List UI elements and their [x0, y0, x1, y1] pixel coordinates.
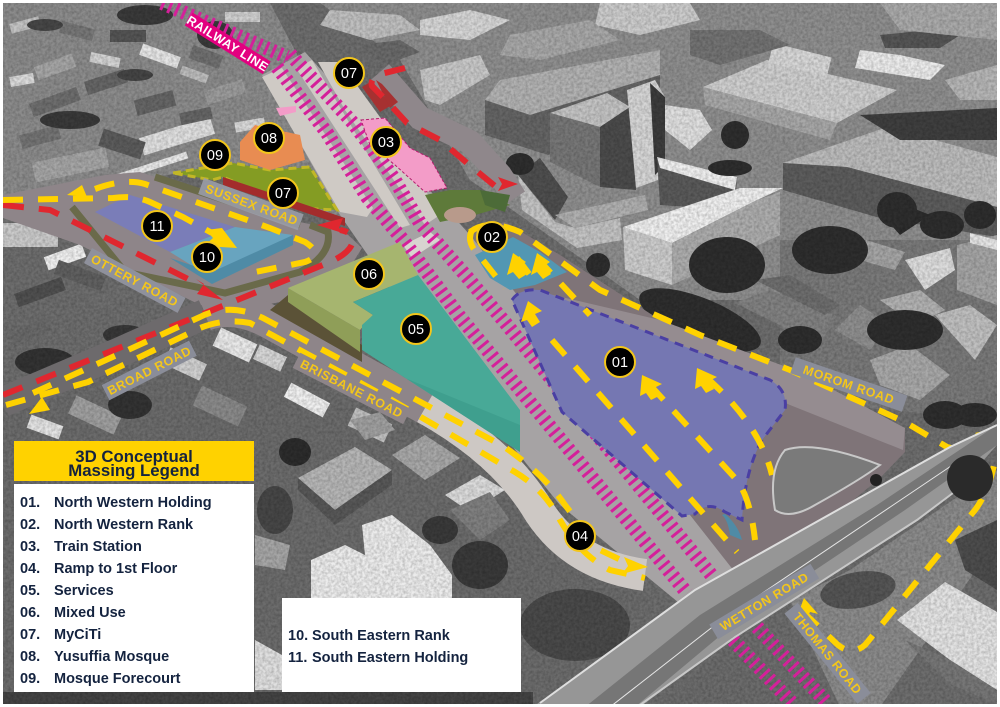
legend panel 01-09: Services	[54, 583, 114, 599]
mass 02: north western rank	[475, 237, 567, 290]
badge numbers: 03	[378, 135, 394, 151]
icon: red arrow Ottery	[196, 279, 223, 300]
legend panel 10-11: 10.	[288, 628, 308, 644]
legend panel 01-09: 02.	[20, 517, 40, 533]
red bus routes	[3, 68, 518, 395]
number badges	[142, 58, 635, 551]
icon: red arrow station	[498, 177, 518, 191]
legend panel 10-11: South Eastern Holding	[312, 650, 468, 666]
small pink forecourt	[276, 106, 296, 116]
mass 11: south eastern holding	[95, 195, 235, 252]
legend panel 01-09: 08.	[20, 649, 40, 665]
legend panel 01-09: Train Station	[54, 539, 142, 555]
tree at corner	[947, 455, 993, 501]
legend panel 10-11	[282, 598, 521, 692]
legend heading: Massing Legend	[68, 461, 200, 480]
railway hatching	[162, 3, 828, 704]
label: Wetton Road: WETTON ROAD	[718, 570, 811, 634]
rail corridor	[262, 52, 745, 612]
legend panel 01-09: 03.	[20, 539, 40, 555]
legend panel 01-09: Mosque Forecourt	[54, 671, 181, 687]
label: Broad Road: BROAD ROAD	[105, 344, 194, 398]
badge numbers: 02	[484, 230, 500, 246]
mass 07 lower: MyCiTi building	[223, 177, 345, 226]
label: Morom Road	[790, 357, 907, 412]
mid-right houses	[735, 233, 997, 410]
label: Sussex Road: SUSSEX ROAD	[203, 182, 300, 228]
mass 06: mixed use	[270, 242, 418, 362]
legend panel 10-11: South Eastern Rank	[312, 628, 451, 644]
yellow pedestrian routes	[3, 182, 997, 650]
neighbourhood houses lower left	[3, 223, 660, 704]
garden roundabout	[773, 447, 882, 514]
mass 03: train station	[361, 118, 447, 192]
legend panel 01-09	[14, 484, 254, 692]
legend panel 01-09: 06.	[20, 605, 40, 621]
badge numbers: 06	[361, 267, 377, 283]
legend panel 01-09: North Western Rank	[54, 517, 194, 533]
legend panel 01-09: Mixed Use	[54, 605, 126, 621]
legend panel 10-11: 11.	[288, 650, 307, 666]
legend panel 01-09: 09.	[20, 671, 40, 687]
blue edge of holding	[722, 514, 742, 540]
legend panel 01-09: North Western Holding	[54, 495, 212, 511]
legend panel 01-09: 05.	[20, 583, 40, 599]
label: Brisbane Road: BRISBANE ROAD	[298, 357, 405, 421]
label: Morom Road: MOROM ROAD	[801, 363, 896, 407]
legend panel 01-09: 07.	[20, 627, 40, 643]
legend heading	[14, 441, 254, 481]
badge numbers: 11	[149, 219, 165, 235]
legend panel 01-09: 04.	[20, 561, 40, 577]
legend heading: 3D Conceptual	[75, 447, 193, 466]
neighbourhood houses upper left	[9, 5, 266, 195]
badge numbers	[149, 66, 628, 545]
badge numbers: 09	[207, 148, 223, 164]
icon: yellow arrows	[29, 185, 997, 620]
station landscape	[425, 190, 510, 223]
label: Railway Line: RAILWAY LINE	[184, 13, 271, 75]
legend panel 01-09: Yusuffia Mosque	[54, 649, 169, 665]
icon: red arrow Sussex	[317, 218, 349, 235]
badge numbers: 07	[275, 186, 291, 202]
badge numbers: 07	[341, 66, 357, 82]
road network surfaces	[3, 72, 905, 600]
mass 05: services	[353, 275, 520, 452]
mass 01: north western holding	[512, 290, 785, 520]
mass 10: south eastern rank	[170, 227, 293, 284]
top-right city blocks	[320, 3, 997, 285]
lower right streets and buildings	[791, 470, 997, 704]
mass 07 top: MyCiTi buses	[362, 80, 398, 112]
mass 09: mosque forecourt	[173, 163, 337, 210]
legend panel 01-09: 01.	[20, 495, 40, 511]
mass 08: Yusuffia Mosque	[240, 125, 305, 170]
trees	[506, 121, 997, 429]
legend panel 01-09: Ramp to 1st Floor	[54, 561, 178, 577]
legend panel 01-09: MyCiTi	[54, 627, 101, 643]
badge numbers: 10	[199, 250, 215, 266]
badge numbers: 08	[261, 131, 277, 147]
bridge: Wetton Road	[533, 425, 997, 707]
badge numbers: 05	[408, 322, 424, 338]
ramp to first floor	[425, 408, 645, 575]
hedges around loop	[72, 177, 328, 293]
badge numbers: 04	[572, 529, 588, 545]
badge numbers: 01	[612, 355, 628, 371]
label: Thomas Road: THOMAS ROAD	[790, 610, 864, 697]
label: Ottery Road: OTTERY ROAD	[88, 252, 181, 310]
